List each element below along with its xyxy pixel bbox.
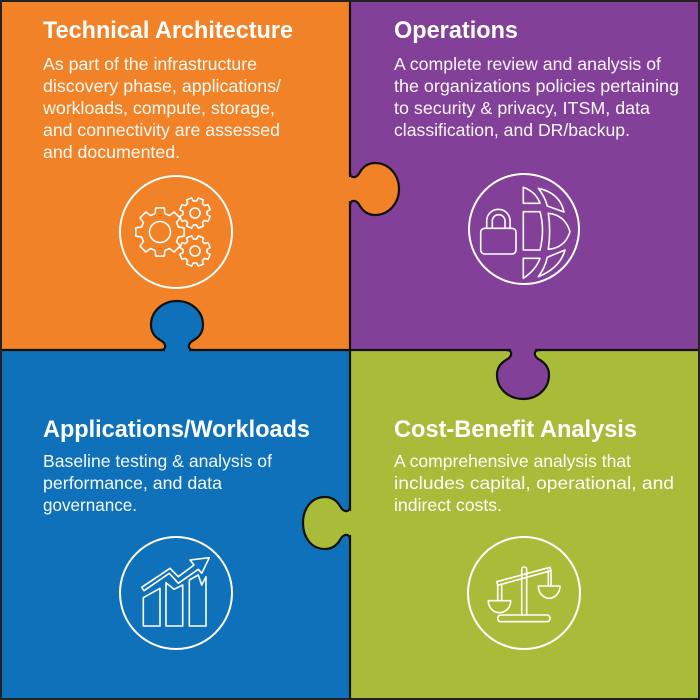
text block: technical architecture description: discovery phase, applications/ (43, 76, 281, 96)
text block: operations description: classification, and DR/backup. (394, 120, 630, 140)
panel: applications/workloads (0, 350, 350, 700)
text block: technical architecture description: and connectivity are assessed (43, 120, 280, 140)
puzzle tab: purple into green (497, 345, 549, 399)
text block: applications description: performance, and data (43, 473, 222, 493)
panel: technical architecture (0, 0, 350, 350)
text block: operations description: to security & privacy, ITSM, data (394, 98, 650, 118)
heading: cost-benefit analysis: Cost-Benefit Analysis (394, 416, 637, 443)
text block: applications description: governance. (43, 495, 137, 515)
text block: technical architecture description (42, 54, 281, 162)
text block: applications description: Baseline testing & analysis of (43, 451, 272, 471)
text block: applications description (43, 451, 272, 515)
icon: growth bar chart (120, 537, 232, 649)
panel: cost-benefit analysis (350, 350, 700, 700)
text block: technical architecture description: As part of the infrastructure (43, 54, 257, 74)
text block: operations description (394, 54, 679, 140)
icon: lock and globe (469, 174, 579, 284)
panel: operations (350, 0, 700, 350)
text block: operations description: A complete review and analysis of (394, 54, 661, 74)
text block: cost-benefit description: indirect costs. (394, 495, 502, 515)
icon: balance scales (468, 537, 580, 649)
puzzle tab: blue into orange (151, 301, 203, 355)
heading: technical architecture: Technical Architecture (43, 17, 293, 44)
heading: operations: Operations (394, 17, 518, 44)
heading: applications/workloads: Applications/Workloads (43, 416, 310, 443)
text block: cost-benefit description: includes capital, operational, and (394, 473, 674, 493)
puzzle tab: green into blue (303, 497, 353, 549)
text block: technical architecture description: and documented. (43, 142, 180, 162)
text block: cost-benefit description (394, 451, 674, 515)
text block: technical architecture description: workloads, compute, storage, (42, 98, 275, 118)
puzzle tab: orange into purple (347, 163, 399, 215)
text block: cost-benefit description: A comprehensive analysis that (394, 451, 631, 471)
icon: gears (120, 176, 232, 288)
text block: operations description: the organizations policies pertaining (394, 76, 679, 96)
